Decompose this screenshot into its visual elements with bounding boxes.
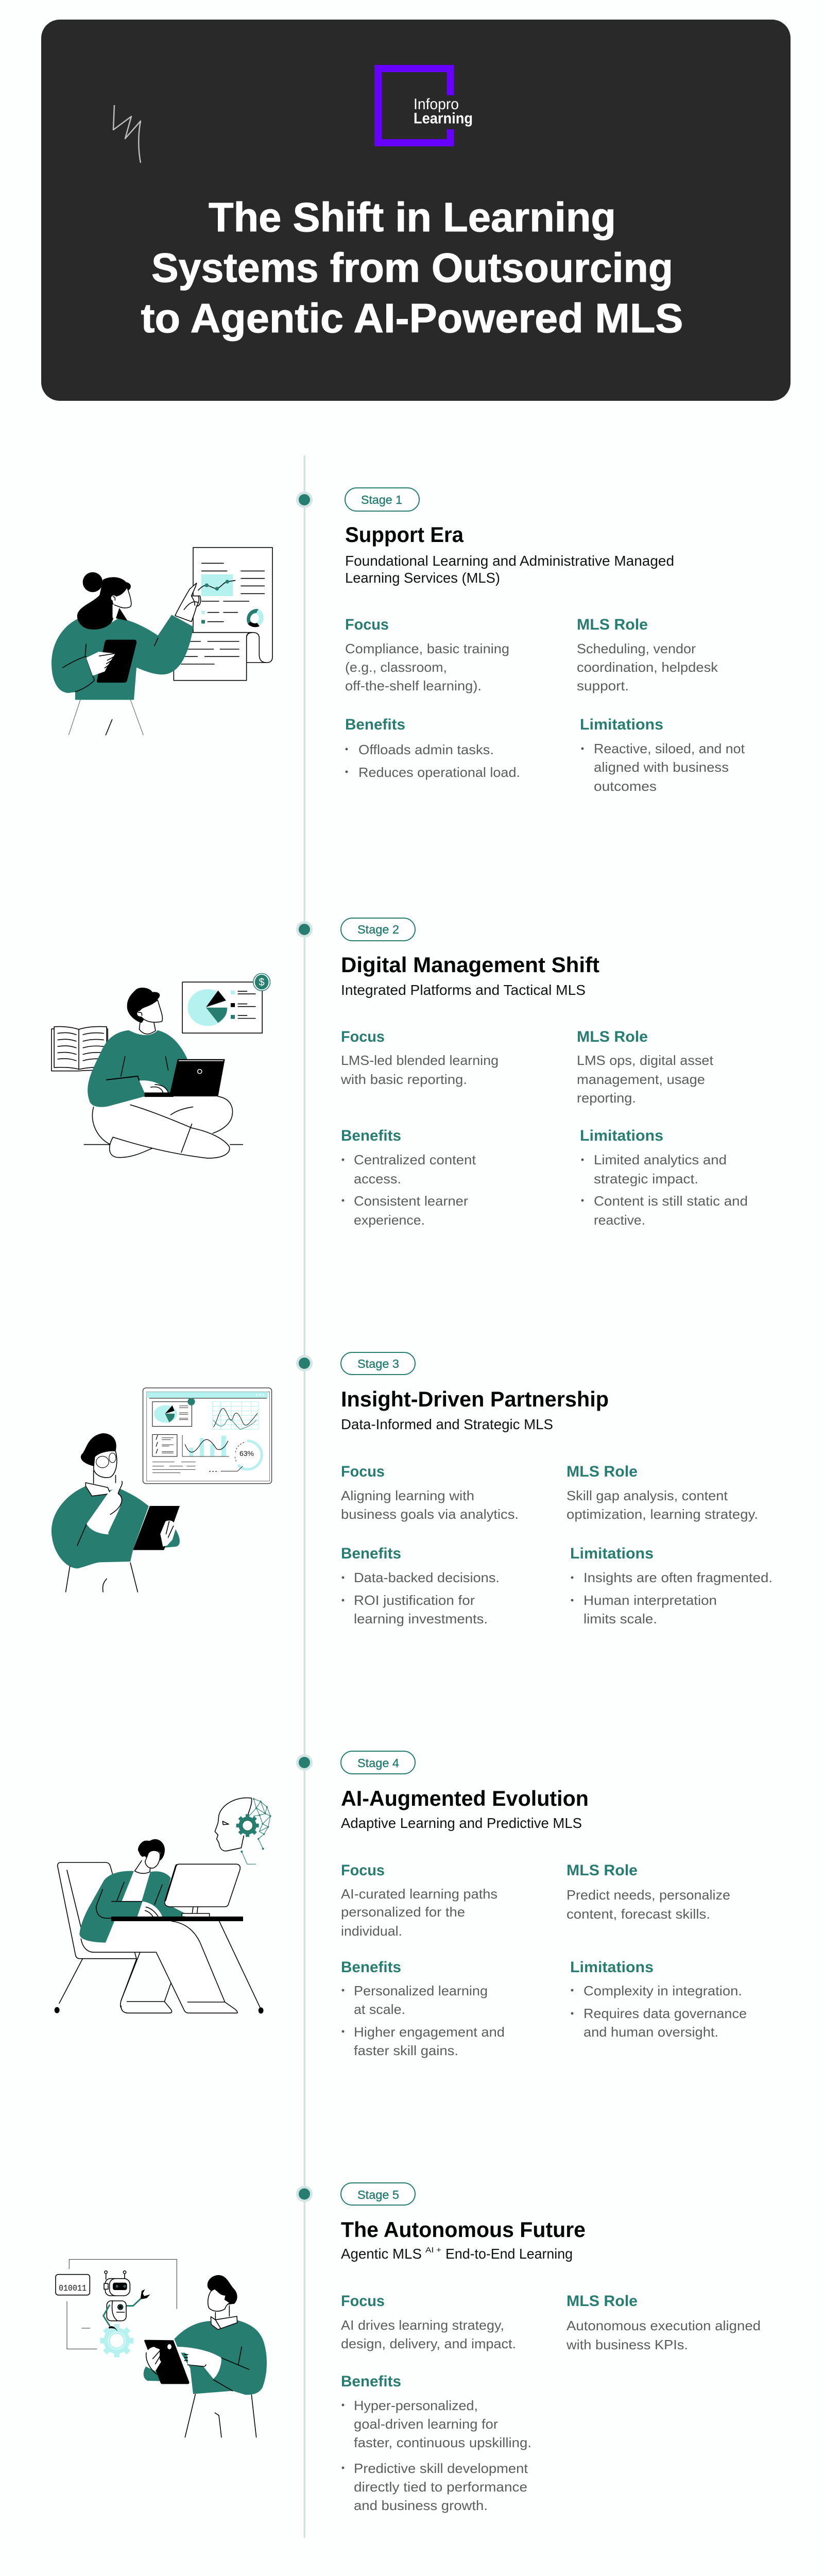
illustration: person with laptop and book xyxy=(52,973,270,1158)
logo: Infopro Learning: Learning xyxy=(414,110,473,127)
focus block: Focus xyxy=(341,1028,385,1045)
focus block xyxy=(341,1862,497,1939)
focus block: individual. xyxy=(341,1923,402,1939)
stage subtitle xyxy=(341,2246,573,2262)
stage pill xyxy=(341,1751,415,1774)
stage title: The Autonomous Future xyxy=(341,2217,586,2242)
MLS role block: MLS Role xyxy=(577,1028,648,1045)
focus block: AI drives learning strategy, xyxy=(341,2317,504,2333)
stage subtitle: Learning Services (MLS) xyxy=(345,570,500,586)
title: to Agentic AI-Powered MLS xyxy=(141,295,683,341)
focus block: personalized for the xyxy=(341,1904,465,1920)
illustration: woman presenting report xyxy=(52,548,272,735)
stage title: Digital Management Shift xyxy=(341,953,599,977)
limitations block: Limited analytics and xyxy=(594,1152,727,1167)
benefits block: experience. xyxy=(354,1212,425,1228)
benefits block: goal-driven learning for xyxy=(354,2416,498,2432)
stage 2 panel xyxy=(52,918,748,1228)
benefits block: Reduces operational load. xyxy=(358,765,520,780)
limitations block: Limitations xyxy=(580,1127,663,1144)
limitations block: aligned with business xyxy=(594,759,729,775)
stage title: Support Era xyxy=(345,522,464,547)
benefits block: Data-backed decisions. xyxy=(354,1570,500,1585)
focus block: Focus xyxy=(341,1463,385,1480)
focus block: AI-curated learning paths xyxy=(341,1886,497,1902)
limitations block xyxy=(580,1127,748,1228)
MLS role block: reporting. xyxy=(577,1090,636,1106)
stage 3 panel xyxy=(52,1352,772,1626)
stage pill: Stage 3 xyxy=(357,1357,399,1370)
icon: dollar coin: $ xyxy=(259,977,265,988)
stage pill: Stage 1 xyxy=(361,493,402,506)
limitations block: Insights are often fragmented. xyxy=(583,1570,772,1585)
focus block: off-the-shelf learning). xyxy=(345,678,482,693)
benefits block: Benefits xyxy=(341,1959,401,1976)
illustration: person at computer with AI head xyxy=(55,1798,271,2013)
benefits block: Predictive skill development xyxy=(354,2461,528,2476)
focus block: Aligning learning with xyxy=(341,1488,474,1503)
benefits block: Benefits xyxy=(345,716,405,733)
stage pill xyxy=(341,2183,415,2205)
timeline dot 4 xyxy=(296,1754,313,1771)
MLS role block: optimization, learning strategy. xyxy=(566,1506,758,1522)
limitations block xyxy=(580,716,745,794)
stage subtitle: Data-Informed and Strategic MLS xyxy=(341,1416,553,1432)
logo: Infopro Learning: Infopro xyxy=(414,96,459,113)
benefits block: Hyper-personalized, xyxy=(354,2398,478,2413)
stage pill: Stage 4 xyxy=(357,1756,399,1770)
limitations block: Limitations xyxy=(580,716,663,733)
stage subtitle: Integrated Platforms and Tactical MLS xyxy=(341,982,586,998)
timeline dot 3 xyxy=(296,1355,313,1371)
focus block: Compliance, basic training xyxy=(345,641,509,656)
focus block xyxy=(341,2293,516,2351)
limitations block xyxy=(570,1959,747,2040)
MLS role block: content, forecast skills. xyxy=(566,1906,710,1922)
timeline line xyxy=(304,455,305,2538)
focus block: Focus xyxy=(341,1862,385,1879)
benefits block xyxy=(345,716,520,780)
benefits block: at scale. xyxy=(354,2002,405,2017)
stage title: Insight-Driven Partnership xyxy=(341,1387,609,1411)
header panel xyxy=(41,20,791,401)
limitations block: Requires data governance xyxy=(583,2006,747,2021)
MLS role block xyxy=(566,2293,761,2352)
MLS role block: management, usage xyxy=(577,1072,705,1087)
benefits block: Benefits xyxy=(341,2373,401,2390)
timeline dot 5 xyxy=(296,2185,313,2202)
benefits block: faster skill gains. xyxy=(354,2043,458,2058)
stage pill xyxy=(341,918,415,941)
focus block: business goals via analytics. xyxy=(341,1506,519,1522)
limitations block: Limitations xyxy=(570,1959,654,1976)
limitations block: strategic impact. xyxy=(594,1171,698,1187)
MLS role block: support. xyxy=(577,678,629,693)
stage subtitle: Agentic MLS xyxy=(341,2246,422,2262)
benefits block xyxy=(341,1959,505,2058)
benefits block: ROI justification for xyxy=(354,1592,475,1608)
limitations block: Reactive, siloed, and not xyxy=(594,741,745,756)
limitations block: reactive. xyxy=(594,1212,645,1228)
MLS role block: Scheduling, vendor xyxy=(577,641,696,656)
stage subtitle: AI + xyxy=(425,2246,441,2255)
title: The Shift in Learning xyxy=(209,194,616,240)
focus block: design, delivery, and impact. xyxy=(341,2336,516,2351)
benefits block: directly tied to performance xyxy=(354,2479,527,2495)
limitations block: Content is still static and xyxy=(594,1193,748,1209)
limitations block: Human interpretation xyxy=(583,1592,717,1608)
limitations block: and human oversight. xyxy=(583,2024,718,2040)
focus block: Focus xyxy=(341,2293,385,2310)
MLS role block: coordination, helpdesk xyxy=(577,659,718,675)
benefits block: Consistent learner xyxy=(354,1193,468,1209)
limitations block: Complexity in integration. xyxy=(583,1983,742,1998)
MLS role block xyxy=(566,1463,758,1522)
MLS role block: MLS Role xyxy=(566,1463,638,1480)
limitations block xyxy=(570,1545,772,1626)
MLS role block: with business KPIs. xyxy=(566,2337,688,2352)
illustration: person with tablet and robot xyxy=(56,2259,267,2437)
focus block: LMS-led blended learning xyxy=(341,1053,499,1068)
benefits block xyxy=(341,1545,500,1626)
focus block xyxy=(341,1463,519,1522)
title xyxy=(141,194,683,341)
stage pill: Stage 2 xyxy=(357,923,399,936)
limitations block: outcomes xyxy=(594,778,657,794)
benefits block: and business growth. xyxy=(354,2498,488,2513)
limitations block: Limitations xyxy=(570,1545,654,1562)
benefits block: Benefits xyxy=(341,1127,401,1144)
stage pill xyxy=(345,488,419,511)
stage subtitle: Adaptive Learning and Predictive MLS xyxy=(341,1815,582,1831)
stage pill xyxy=(341,1352,415,1375)
timeline dot 2 xyxy=(296,921,313,938)
MLS role block: Predict needs, personalize xyxy=(566,1887,730,1903)
benefits block: Benefits xyxy=(341,1545,401,1562)
stage subtitle xyxy=(345,553,674,586)
logo: Infopro Learning xyxy=(378,69,473,143)
focus block xyxy=(340,1028,499,1087)
binary code label: 010011 xyxy=(59,2284,87,2294)
MLS role block: MLS Role xyxy=(577,616,648,633)
MLS role block: Autonomous execution aligned xyxy=(566,2318,761,2333)
stage subtitle: Foundational Learning and Administrative Managed xyxy=(345,553,674,569)
focus block: (e.g., classroom, xyxy=(345,659,447,675)
benefits block: learning investments. xyxy=(354,1611,488,1626)
stage title: AI-Augmented Evolution xyxy=(341,1786,589,1810)
stage 1 panel xyxy=(52,488,745,794)
focus block: Focus xyxy=(345,616,389,633)
stage subtitle: End-to-End Learning xyxy=(445,2246,573,2262)
MLS role block xyxy=(566,1862,730,1922)
MLS role block: MLS Role xyxy=(566,2293,638,2310)
limitations block: limits scale. xyxy=(583,1611,657,1626)
MLS role block xyxy=(577,1028,714,1106)
MLS role block xyxy=(577,616,718,693)
benefits block: Higher engagement and xyxy=(354,2024,505,2040)
MLS role block: LMS ops, digital asset xyxy=(577,1053,714,1068)
illustration: analyst with dashboard xyxy=(52,1388,272,1592)
stage pill: Stage 5 xyxy=(357,2188,399,2201)
focus block: with basic reporting. xyxy=(340,1072,467,1087)
benefits block: access. xyxy=(354,1171,401,1187)
benefits block: Offloads admin tasks. xyxy=(358,742,494,757)
dashboard gauge value: 63% xyxy=(239,1449,254,1458)
benefits block: faster, continuous upskilling. xyxy=(354,2435,531,2450)
benefits block: Personalized learning xyxy=(354,1983,488,1998)
focus block xyxy=(345,616,509,693)
stage 5 panel xyxy=(56,2183,761,2513)
title: Systems from Outsourcing xyxy=(151,245,673,291)
timeline dot 1 xyxy=(296,492,313,508)
stage 4 panel xyxy=(55,1751,747,2058)
MLS role block: MLS Role xyxy=(566,1862,638,1879)
benefits block: Centralized content xyxy=(354,1152,476,1167)
icon: squiggle decoration xyxy=(113,105,141,163)
MLS role block: Skill gap analysis, content xyxy=(566,1488,728,1503)
benefits block xyxy=(341,2373,531,2513)
benefits block xyxy=(341,1127,476,1228)
